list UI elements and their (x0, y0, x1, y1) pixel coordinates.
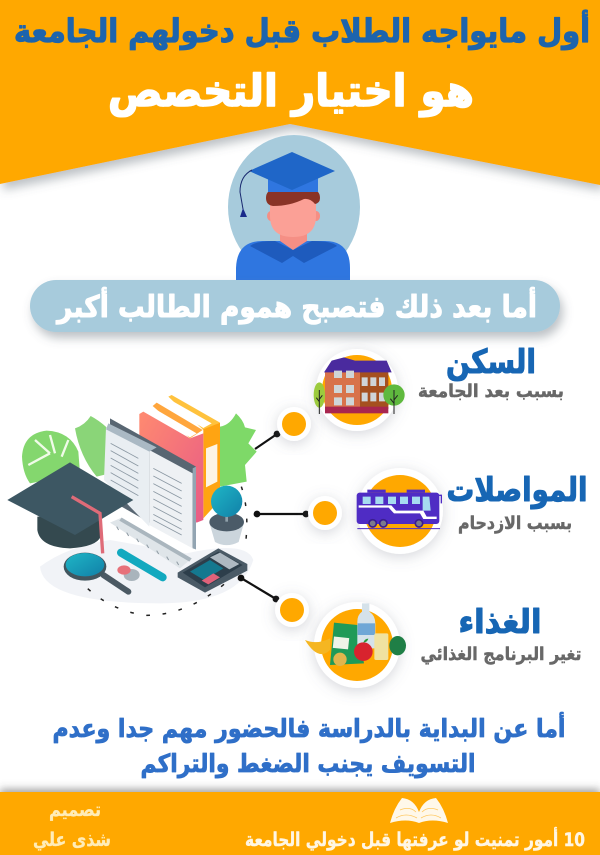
label round (333, 653, 347, 666)
calculator (178, 548, 247, 593)
footer band (0, 792, 600, 855)
teal bar (121, 553, 163, 577)
tree left (314, 382, 325, 408)
connector: housing (255, 431, 280, 449)
roof vents (367, 490, 425, 493)
face (270, 198, 316, 237)
node: transport (308, 496, 342, 530)
ears (267, 211, 320, 221)
neck (280, 225, 307, 250)
orange binder (168, 395, 220, 518)
apple leaf (363, 639, 368, 643)
text: food reason: تغير البرنامج الغذائي (420, 644, 582, 665)
dashed ring (87, 487, 247, 615)
desk shadow blob (40, 540, 253, 603)
right wing (360, 372, 388, 409)
bottle (357, 603, 375, 648)
portrait circle (228, 135, 360, 279)
leaf right (220, 413, 257, 487)
left wing (325, 372, 360, 409)
windshield (423, 497, 431, 511)
red book (139, 403, 203, 523)
green bag (330, 623, 364, 665)
title line 2: هو اختيار التخصص (108, 66, 474, 117)
ruler (110, 518, 192, 568)
jar (374, 633, 388, 660)
bottle label (358, 623, 375, 635)
icon: groceries (305, 602, 406, 688)
subtitle text: أما بعد ذلك فتصبح هموم الطالب أكبر (55, 287, 537, 325)
wheels (369, 520, 423, 527)
road line (357, 527, 440, 530)
gown (236, 241, 350, 280)
subtitle pill (30, 280, 560, 332)
icon: open book (390, 798, 448, 823)
tassel cord (240, 170, 252, 209)
broccoli (389, 636, 406, 655)
leaf left (22, 431, 80, 483)
hair (266, 190, 320, 206)
heading: food: الغذاء (458, 602, 542, 641)
base (325, 407, 388, 413)
bag label (333, 637, 349, 649)
roof (324, 357, 392, 372)
footer text: designer name: شذى علي (33, 829, 111, 851)
tassel (240, 208, 247, 217)
windows (363, 497, 420, 504)
illustration: study desk (7, 395, 257, 615)
node: housing (277, 407, 311, 441)
bus body (357, 493, 439, 524)
text: housing reason: بسبب بعد الجامعة (418, 381, 564, 402)
gown collar (250, 241, 337, 263)
potted plant (209, 486, 244, 545)
connector: food (238, 575, 279, 602)
footer text: design label: تصميم (49, 799, 101, 821)
icon: bus (357, 468, 443, 554)
magnifier (64, 553, 128, 592)
mortar board (249, 152, 335, 190)
windows (334, 371, 385, 405)
eraser (117, 565, 140, 581)
graduation cap (7, 462, 133, 553)
apple (354, 642, 373, 661)
node: food (275, 593, 309, 627)
heading: housing: السكن (446, 342, 536, 382)
tree right (383, 384, 405, 406)
leaf middle (75, 416, 110, 477)
open book (104, 418, 196, 549)
bananas (305, 638, 330, 654)
text: transport reason: بسبب الازدحام (458, 513, 572, 534)
white stripe (359, 505, 437, 519)
advice line 2: التسويف يجنب الضغط والتراكم (140, 749, 476, 779)
header banner (0, 0, 600, 185)
connector: transport (254, 511, 309, 517)
icon: graduate student (228, 135, 360, 280)
cap body (268, 176, 318, 192)
mirror (439, 495, 441, 503)
icon: housing building (314, 349, 405, 431)
